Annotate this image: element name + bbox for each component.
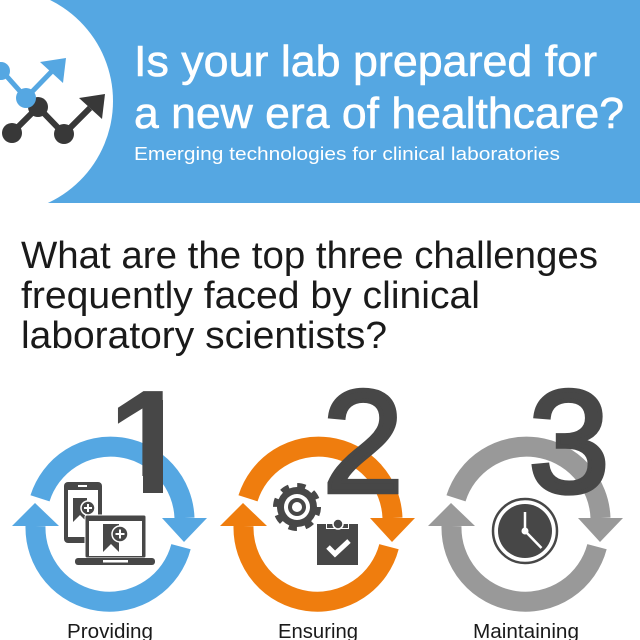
cycle arrows: orange bbox=[220, 447, 415, 602]
icon: gear and clipboard bbox=[276, 486, 358, 565]
icon: phone and laptop with bookmarks bbox=[64, 482, 155, 565]
title: Is your lab prepared for bbox=[134, 37, 597, 86]
panel: challenge 1 bbox=[12, 391, 207, 640]
subtitle: Emerging technologies for clinical laboratories bbox=[134, 144, 560, 164]
icon: trend arrows bbox=[0, 58, 105, 144]
question heading bbox=[21, 235, 598, 357]
panel: challenge 3 bbox=[428, 360, 623, 640]
number 1 bbox=[118, 391, 163, 493]
number 1: 1 bbox=[108, 360, 190, 525]
cycle arrows: blue bbox=[12, 447, 207, 602]
question heading: laboratory scientists? bbox=[21, 315, 387, 357]
title bbox=[134, 37, 624, 138]
panel: challenge 2 bbox=[220, 360, 415, 640]
cycle arrows: gray bbox=[428, 447, 623, 602]
question heading: frequently faced by clinical bbox=[21, 275, 480, 317]
icon: clock bbox=[493, 499, 557, 563]
header banner bbox=[0, 0, 640, 214]
title: a new era of healthcare? bbox=[134, 89, 624, 138]
number 2: 2 bbox=[322, 360, 404, 523]
question heading: What are the top three challenges bbox=[21, 235, 598, 277]
number 3: 3 bbox=[528, 360, 610, 523]
